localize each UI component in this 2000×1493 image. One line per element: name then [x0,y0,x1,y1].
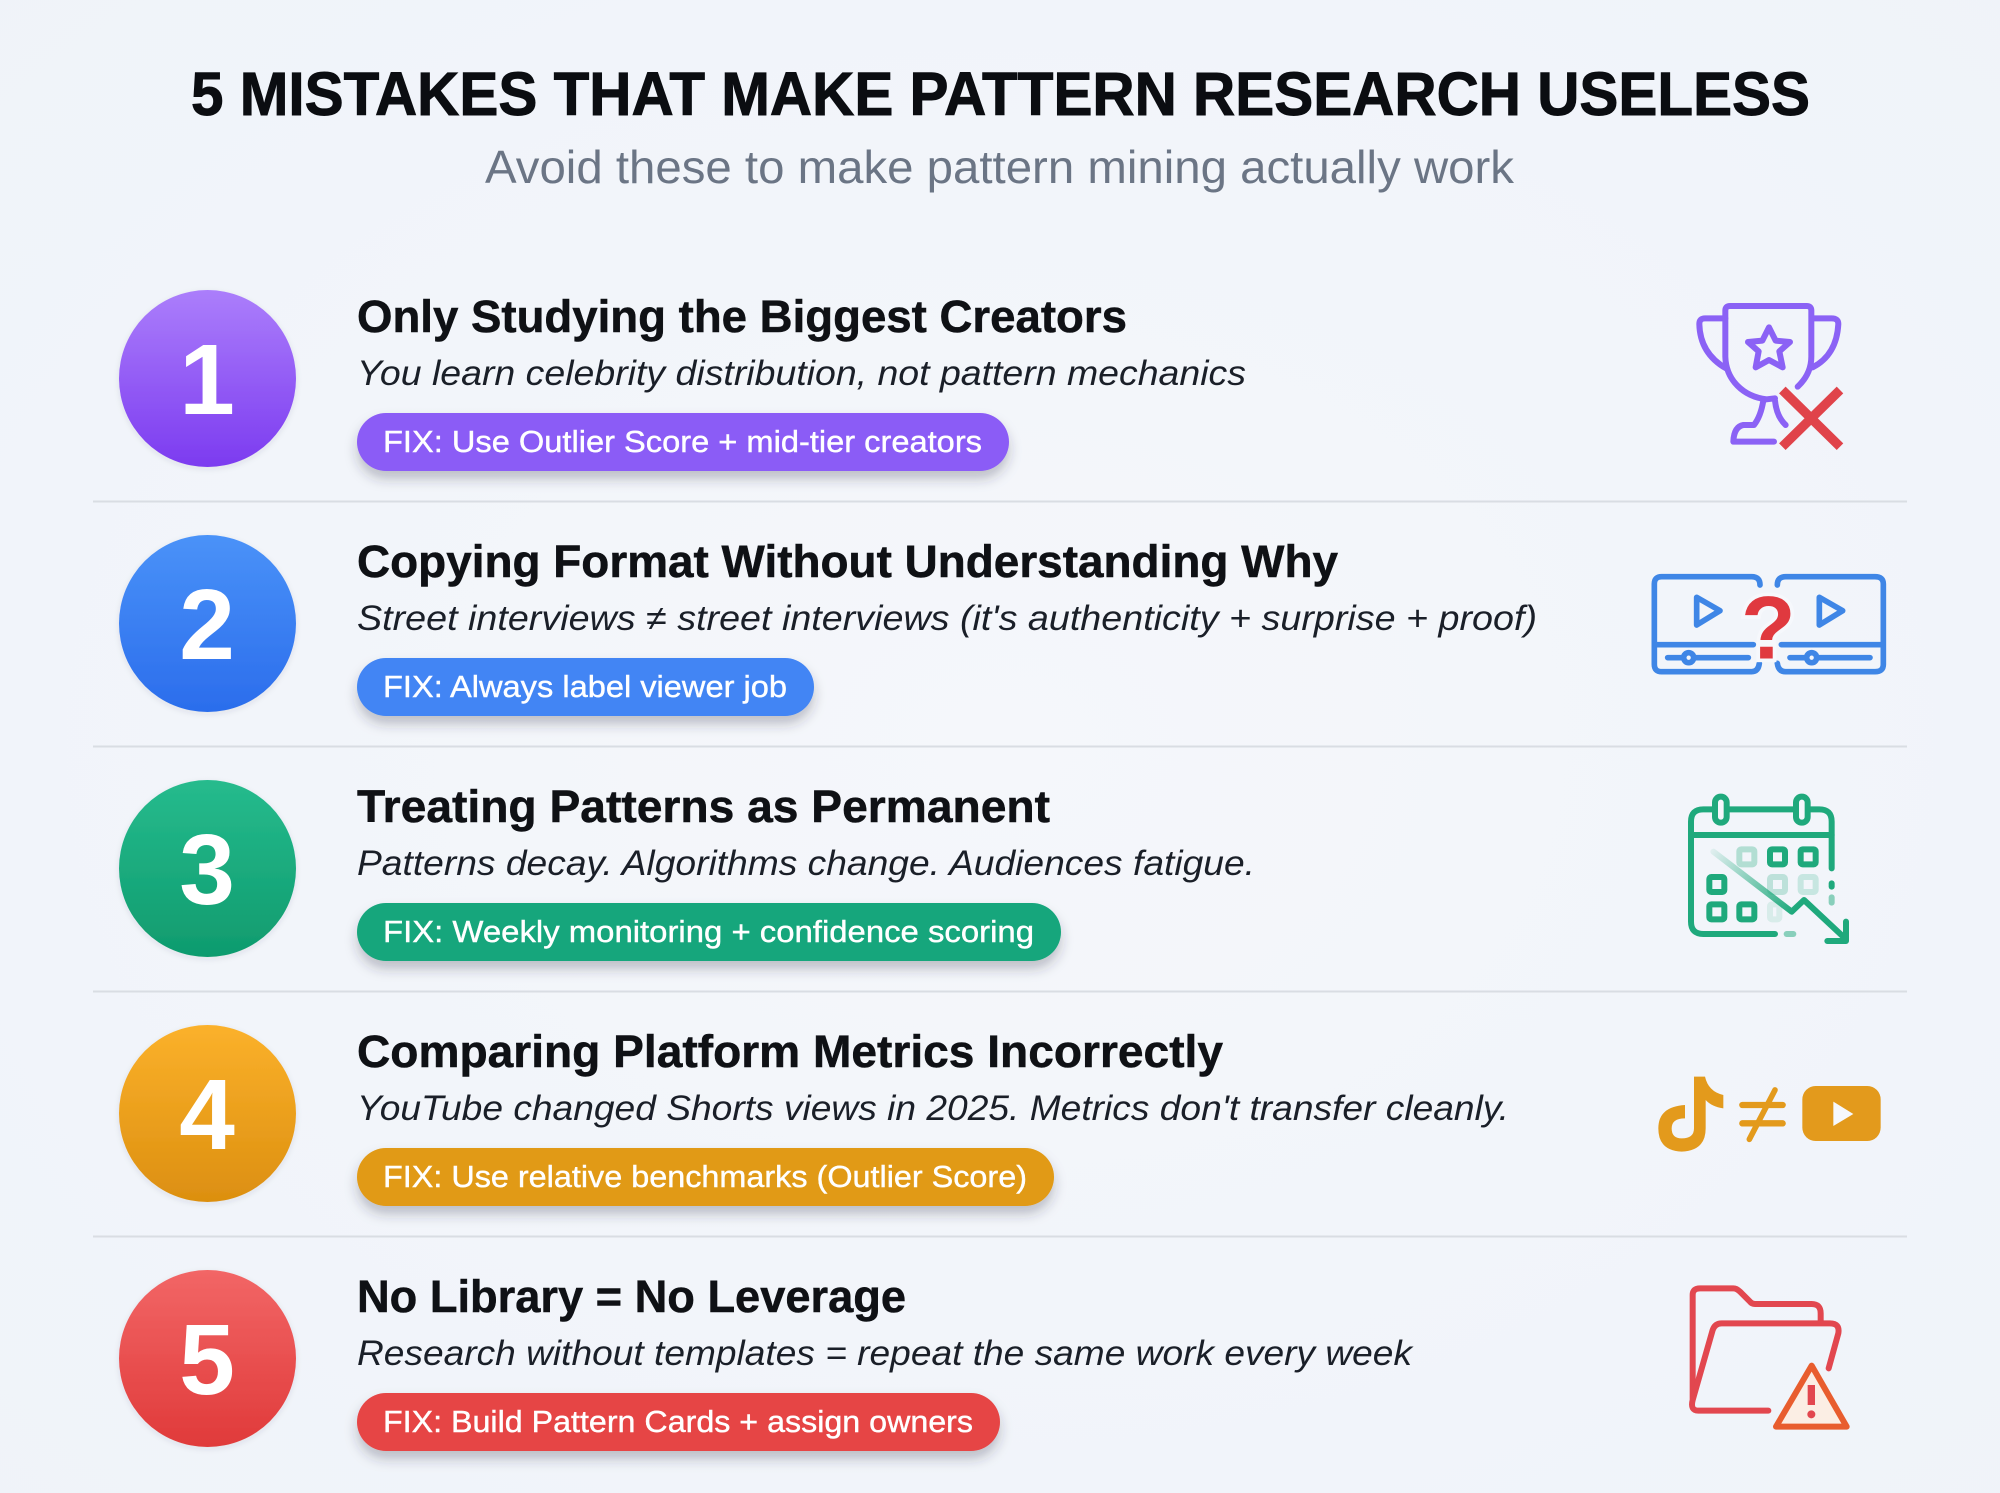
number badge 3: 3 [179,814,235,926]
panel: mistake 2 [119,535,1883,716]
description 3: Patterns decay. Algorithms change. Audiences fatigue. [357,844,1255,883]
fix pill 5 [357,1393,1000,1451]
heading 2: Copying Format Without Understanding Why [357,536,1338,587]
icon: two videos with question mark: ? [1741,577,1796,677]
description 5: Research without templates = repeat the same work every week [357,1334,1414,1373]
description 1: You learn celebrity distribution, not pattern mechanics [357,354,1246,393]
fix pill 1 [357,413,1009,471]
title: 5 MISTAKES THAT MAKE PATTERN RESEARCH USELESS [191,60,1810,128]
icon: two videos with question mark [1654,577,1883,677]
number badge 1 [119,290,296,467]
number badge 5: 5 [179,1304,235,1416]
number badge 2 [119,535,296,712]
number badge 4: 4 [179,1059,235,1171]
number badge 3 [119,780,296,957]
panel: mistake 1 [119,290,1840,471]
subtitle: Avoid these to make pattern mining actually work [485,141,1515,193]
icon: TikTok not equal YouTube [1658,1077,1881,1152]
number badge 5 [119,1270,296,1447]
number badge 2: 2 [179,569,235,681]
panel: mistake 5 [119,1270,1847,1451]
icon: trophy with red X [1699,306,1840,447]
panel: mistake 3 [119,780,1846,961]
heading 4: Comparing Platform Metrics Incorrectly [357,1026,1223,1077]
fix pill 5: FIX: Build Pattern Cards + assign owners [383,1404,973,1439]
fix pill 3: FIX: Weekly monitoring + confidence scoring [383,914,1034,949]
heading 3: Treating Patterns as Permanent [357,781,1050,832]
icon: folder with warning triangle [1692,1288,1847,1427]
fix pill 4 [357,1148,1054,1206]
description 4: YouTube changed Shorts views in 2025. Metrics don't transfer cleanly. [357,1089,1509,1128]
description 2: Street interviews ≠ street interviews (it's authenticity + surprise + proof) [357,599,1537,638]
number badge 1: 1 [179,324,235,436]
icon: calendar with downward trend [1691,797,1846,941]
heading 1: Only Studying the Biggest Creators [357,291,1127,342]
number badge 4 [119,1025,296,1202]
fix pill 2 [357,658,814,716]
heading 5: No Library = No Leverage [357,1271,906,1322]
fix pill 3 [357,903,1061,961]
panel: mistake 4 [119,1025,1881,1206]
fix pill 1: FIX: Use Outlier Score + mid-tier creators [383,424,982,459]
fix pill 4: FIX: Use relative benchmarks (Outlier Score) [383,1159,1027,1194]
fix pill 2: FIX: Always label viewer job [383,669,787,704]
